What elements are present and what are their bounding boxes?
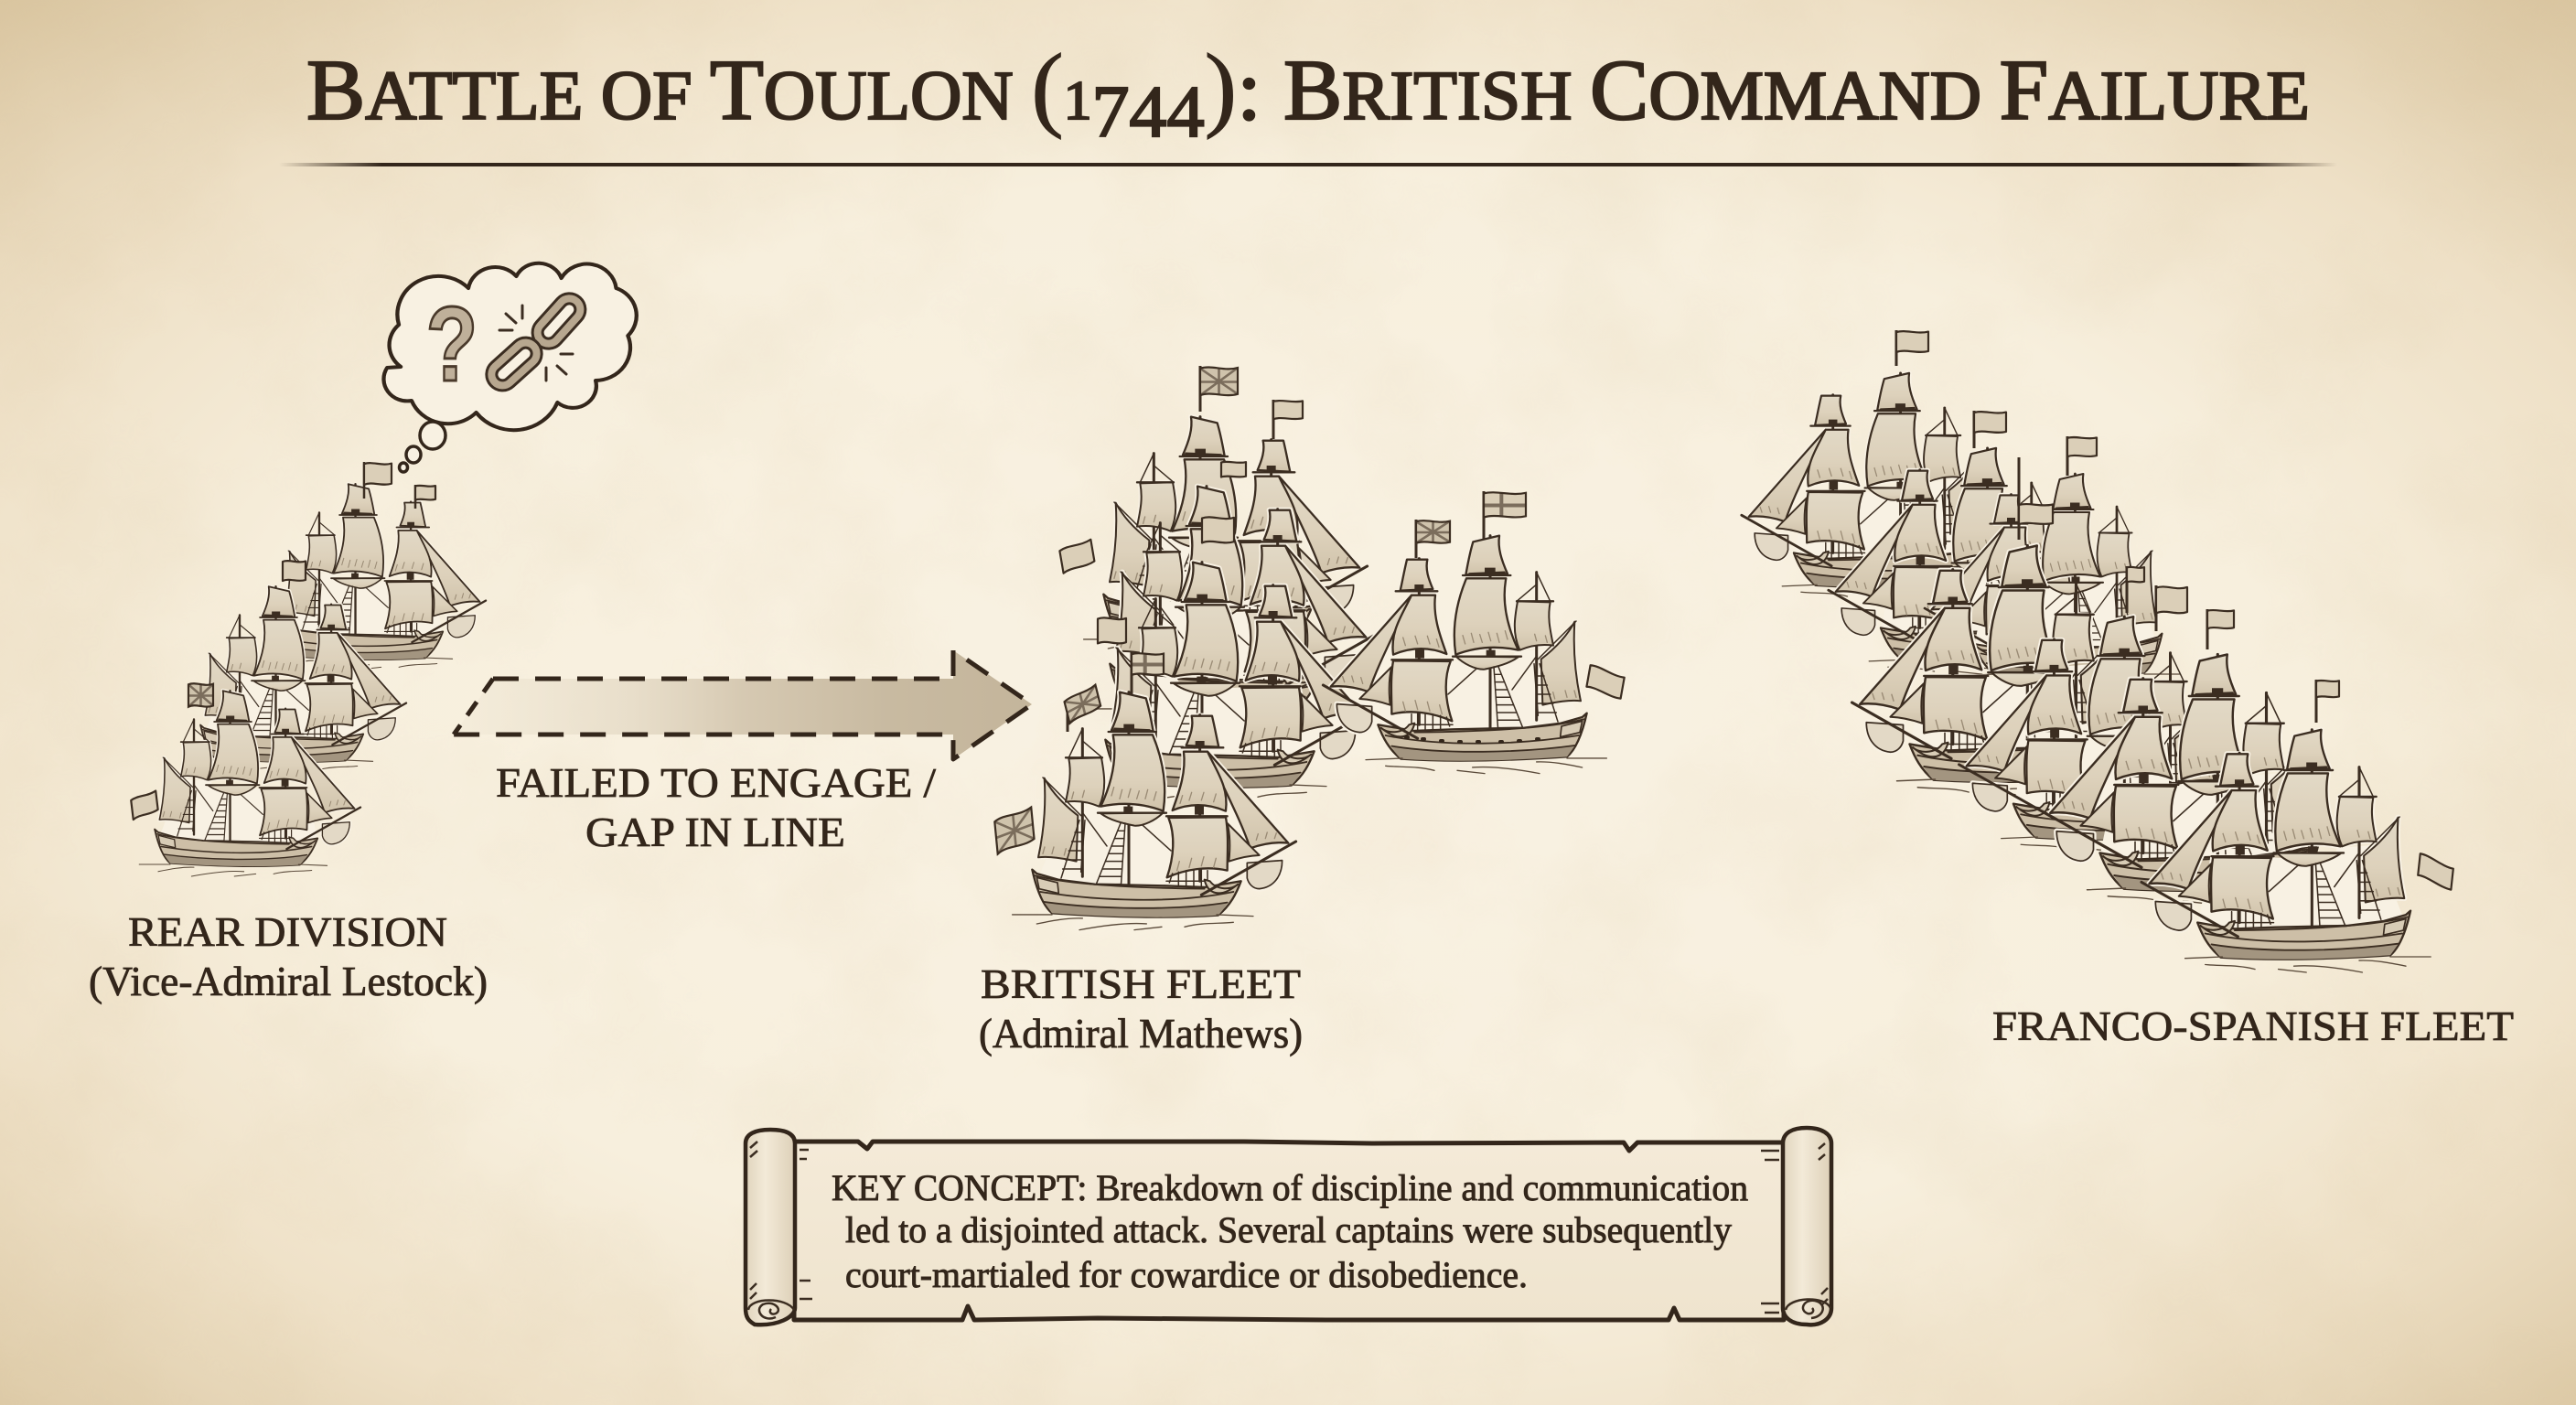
- title: : BRITISH COMMAND FAILURE: [1237, 43, 2303, 138]
- Franco-Spanish fleet label: FRANCO-SPANISH FLEET: [1992, 1003, 2514, 1049]
- failed to engage arrow: [454, 650, 1032, 759]
- title: 744: [1092, 72, 1205, 153]
- thought trail circles: [399, 422, 445, 472]
- cloud outline: [383, 263, 637, 430]
- arrow label: [496, 759, 936, 855]
- ship: French line 3: [1925, 436, 2180, 688]
- ship: French line 2: [1829, 411, 2098, 674]
- key concept text: led to a disjointed attack. Several captains were subsequently: [845, 1209, 1732, 1250]
- ship: rear division middle: [185, 586, 406, 772]
- arrow label: FAILED TO ENGAGE /: [496, 759, 936, 806]
- ship: rear division back: [264, 462, 486, 670]
- ship: rear division front: [131, 691, 360, 876]
- key concept text: court-martialed for cowardice or disobedience.: [845, 1254, 1528, 1295]
- ship: French line 5: [1959, 566, 2239, 853]
- title: BATTLE OF TOULON (1: [306, 35, 1091, 140]
- key concept text: [832, 1167, 1748, 1295]
- British fleet ships: [994, 366, 1625, 930]
- rear division label: REAR DIVISION: [128, 908, 447, 955]
- ship: British front: [994, 652, 1296, 930]
- icon: question mark: ?: [426, 285, 478, 403]
- ship: French line 4: [1852, 457, 2150, 796]
- rear division label: (Vice-Admiral Lestock): [89, 958, 488, 1004]
- ship: British third: [1086, 517, 1369, 800]
- title rule: [279, 163, 2337, 166]
- key concept scroll: [746, 1128, 1831, 1325]
- ship: French line 7: [2141, 680, 2453, 972]
- right roll: [1783, 1128, 1831, 1325]
- rear division label: [89, 908, 488, 1004]
- ship: British second: [1090, 462, 1374, 724]
- roll curls and shading marks: [748, 1142, 1830, 1318]
- ship: British back: [1059, 366, 1368, 655]
- title: ): [1205, 35, 1237, 140]
- ship: French line 1: [1742, 330, 2012, 599]
- arrow label: GAP IN LINE: [585, 809, 845, 855]
- key concept text: KEY CONCEPT: Breakdown of discipline and communication: [832, 1167, 1748, 1208]
- rear division ships: [131, 462, 486, 876]
- left roll: [746, 1130, 795, 1325]
- thought bubble: broken communication: [383, 263, 637, 472]
- ship: French line 6: [2042, 609, 2340, 904]
- icon: broken chain: [487, 294, 585, 390]
- ship: British flagship starboard: [1323, 491, 1625, 774]
- scroll paper: [794, 1142, 1784, 1320]
- Franco-Spanish fleet ships: [1742, 330, 2453, 972]
- British fleet label: [979, 960, 1303, 1056]
- British fleet label: BRITISH FLEET: [981, 960, 1301, 1007]
- British fleet label: (Admiral Mathews): [979, 1010, 1303, 1056]
